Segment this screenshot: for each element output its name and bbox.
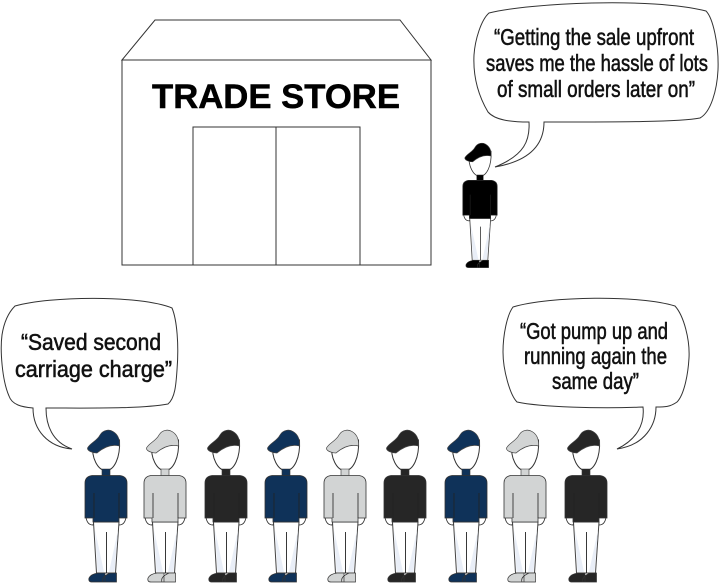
customer 1: navy — [85, 430, 127, 582]
customer 4: navy — [265, 430, 307, 582]
quote text — [486, 24, 708, 102]
customer 5: grey — [324, 430, 366, 582]
store sign: TRADE STORE — [152, 78, 400, 116]
quote text — [15, 329, 172, 382]
customer 6: black — [384, 430, 426, 582]
speech bubble: right customer — [503, 298, 689, 449]
store building — [122, 20, 431, 265]
store worker figure — [463, 143, 497, 268]
store doors — [193, 127, 360, 265]
quote text — [520, 318, 668, 394]
store wall — [122, 60, 431, 265]
customer 3: black — [205, 430, 247, 582]
customer 7: navy — [445, 430, 487, 582]
quote text: same day” — [552, 368, 639, 394]
quote text: “Saved second — [21, 329, 161, 355]
speech bubble: left customer — [1, 298, 178, 449]
customer 9: black — [565, 430, 607, 582]
customer 2: grey — [144, 430, 186, 582]
quote text: running again the — [524, 343, 667, 369]
quote text: “Got pump up and — [520, 318, 668, 344]
speech bubble: store worker — [474, 3, 718, 167]
customer queue — [85, 430, 607, 582]
quote text: carriage charge” — [15, 356, 172, 382]
roof — [122, 20, 431, 60]
customer 8: grey — [504, 430, 546, 582]
